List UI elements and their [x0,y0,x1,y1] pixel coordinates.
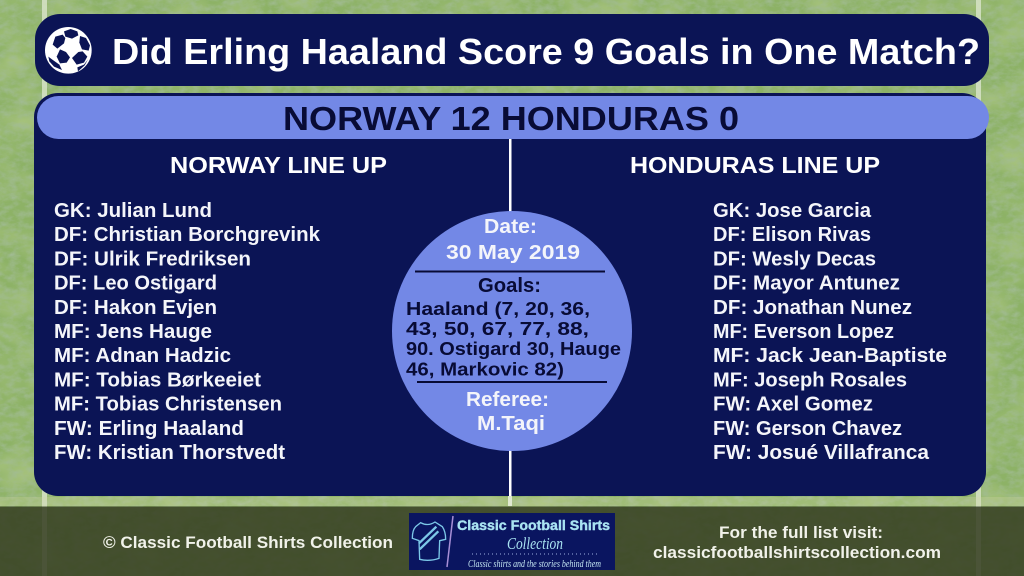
Honduras player list: MF: Everson Lopez [713,321,894,343]
referee: M.Taqi [477,413,545,435]
goals: Haaland (7, 20, 36, [406,298,590,319]
goals: 90. Ostigard 30, Hauge [406,338,621,359]
Honduras player list: MF: Jack Jean-Baptiste [713,345,947,367]
Honduras player list: FW: Gerson Chavez [713,418,902,440]
date [446,216,580,264]
logo [409,513,615,570]
Honduras player list: MF: Joseph Rosales [713,369,907,391]
goals [406,275,621,380]
Norway player list: MF: Jens Hauge [54,321,212,343]
website call to action: classicfootballshirtscollection.com [653,544,941,562]
Norway player list: DF: Hakon Evjen [54,297,217,319]
Honduras player list: GK: Jose Garcia [713,200,872,222]
score banner: NORWAY 12 HONDURAS 0 [283,100,739,137]
referee [466,389,549,435]
logo: Classic shirts and the stories behind them [468,559,601,570]
logo text: Classic Football Shirts [457,517,610,533]
Norway player list: MF: Tobias Børkeeiet [54,369,261,391]
heading: Norway line up: NORWAY LINE UP [170,152,387,178]
Norway player list: GK: Julian Lund [54,200,212,222]
Norway player list: FW: Erling Haaland [54,418,244,440]
date: 30 May 2019 [446,242,580,264]
title text: Did Erling Haaland Score 9 Goals in One Match? [112,31,980,72]
logo: Collection [507,534,563,553]
goals: Goals: [478,275,541,297]
Norway player list [54,200,321,464]
Honduras player list: DF: Mayor Antunez [713,273,900,295]
panel: match details [34,93,989,496]
website call to action: For the full list visit: [719,524,883,542]
Norway player list: FW: Kristian Thorstvedt [54,442,285,464]
referee: Referee: [466,389,549,411]
Honduras player list: DF: Wesly Decas [713,248,876,270]
copyright: © Classic Football Shirts Collection [103,534,393,552]
Norway player list: DF: Leo Ostigard [54,273,217,295]
centre divider [509,138,512,496]
Norway player list: DF: Ulrik Fredriksen [54,248,251,270]
Honduras player list: DF: Elison Rivas [713,224,871,246]
match info circle [392,211,632,451]
icon: shirt [412,522,446,560]
Honduras player list [713,200,947,464]
heading: Honduras line up: HONDURAS LINE UP [630,152,880,178]
title banner [35,14,989,86]
goals: 46, Markovic 82) [406,358,564,380]
score banner [37,96,989,139]
Norway player list: DF: Christian Borchgrevink [54,224,321,246]
Honduras player list: DF: Jonathan Nunez [713,297,912,319]
slash [447,516,453,567]
footer band [0,506,1024,576]
website call to action [653,524,941,562]
icon: football [45,27,92,74]
Norway player list: MF: Adnan Hadzic [54,345,231,367]
date: Date: [484,216,537,238]
Honduras player list: FW: Axel Gomez [713,394,873,416]
goals: 43, 50, 67, 77, 88, [406,318,589,339]
Honduras player list: FW: Josué Villafranca [713,442,930,464]
Norway player list: MF: Tobias Christensen [54,394,282,416]
